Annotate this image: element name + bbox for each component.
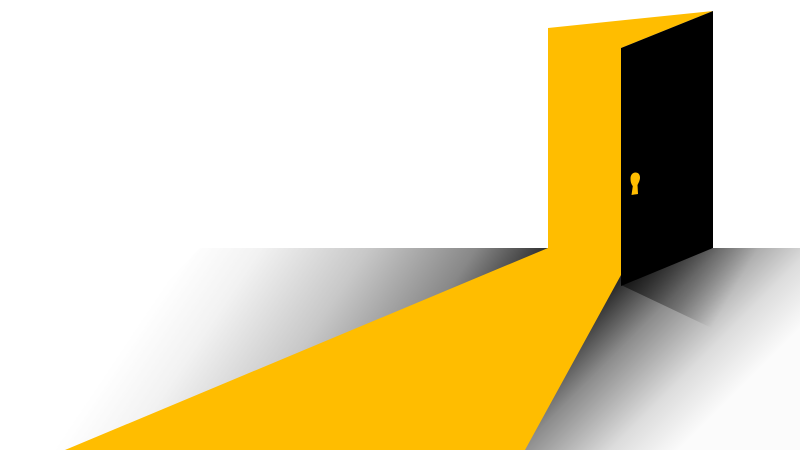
icon: keyhole: [630, 172, 640, 195]
door: [621, 11, 713, 286]
light in doorway: [548, 11, 713, 275]
door cast shadow: [621, 248, 800, 370]
floor shadow: left of light beam: [0, 248, 560, 450]
light on floor: [65, 248, 621, 450]
floor shadow: right of light beam: [510, 248, 800, 450]
